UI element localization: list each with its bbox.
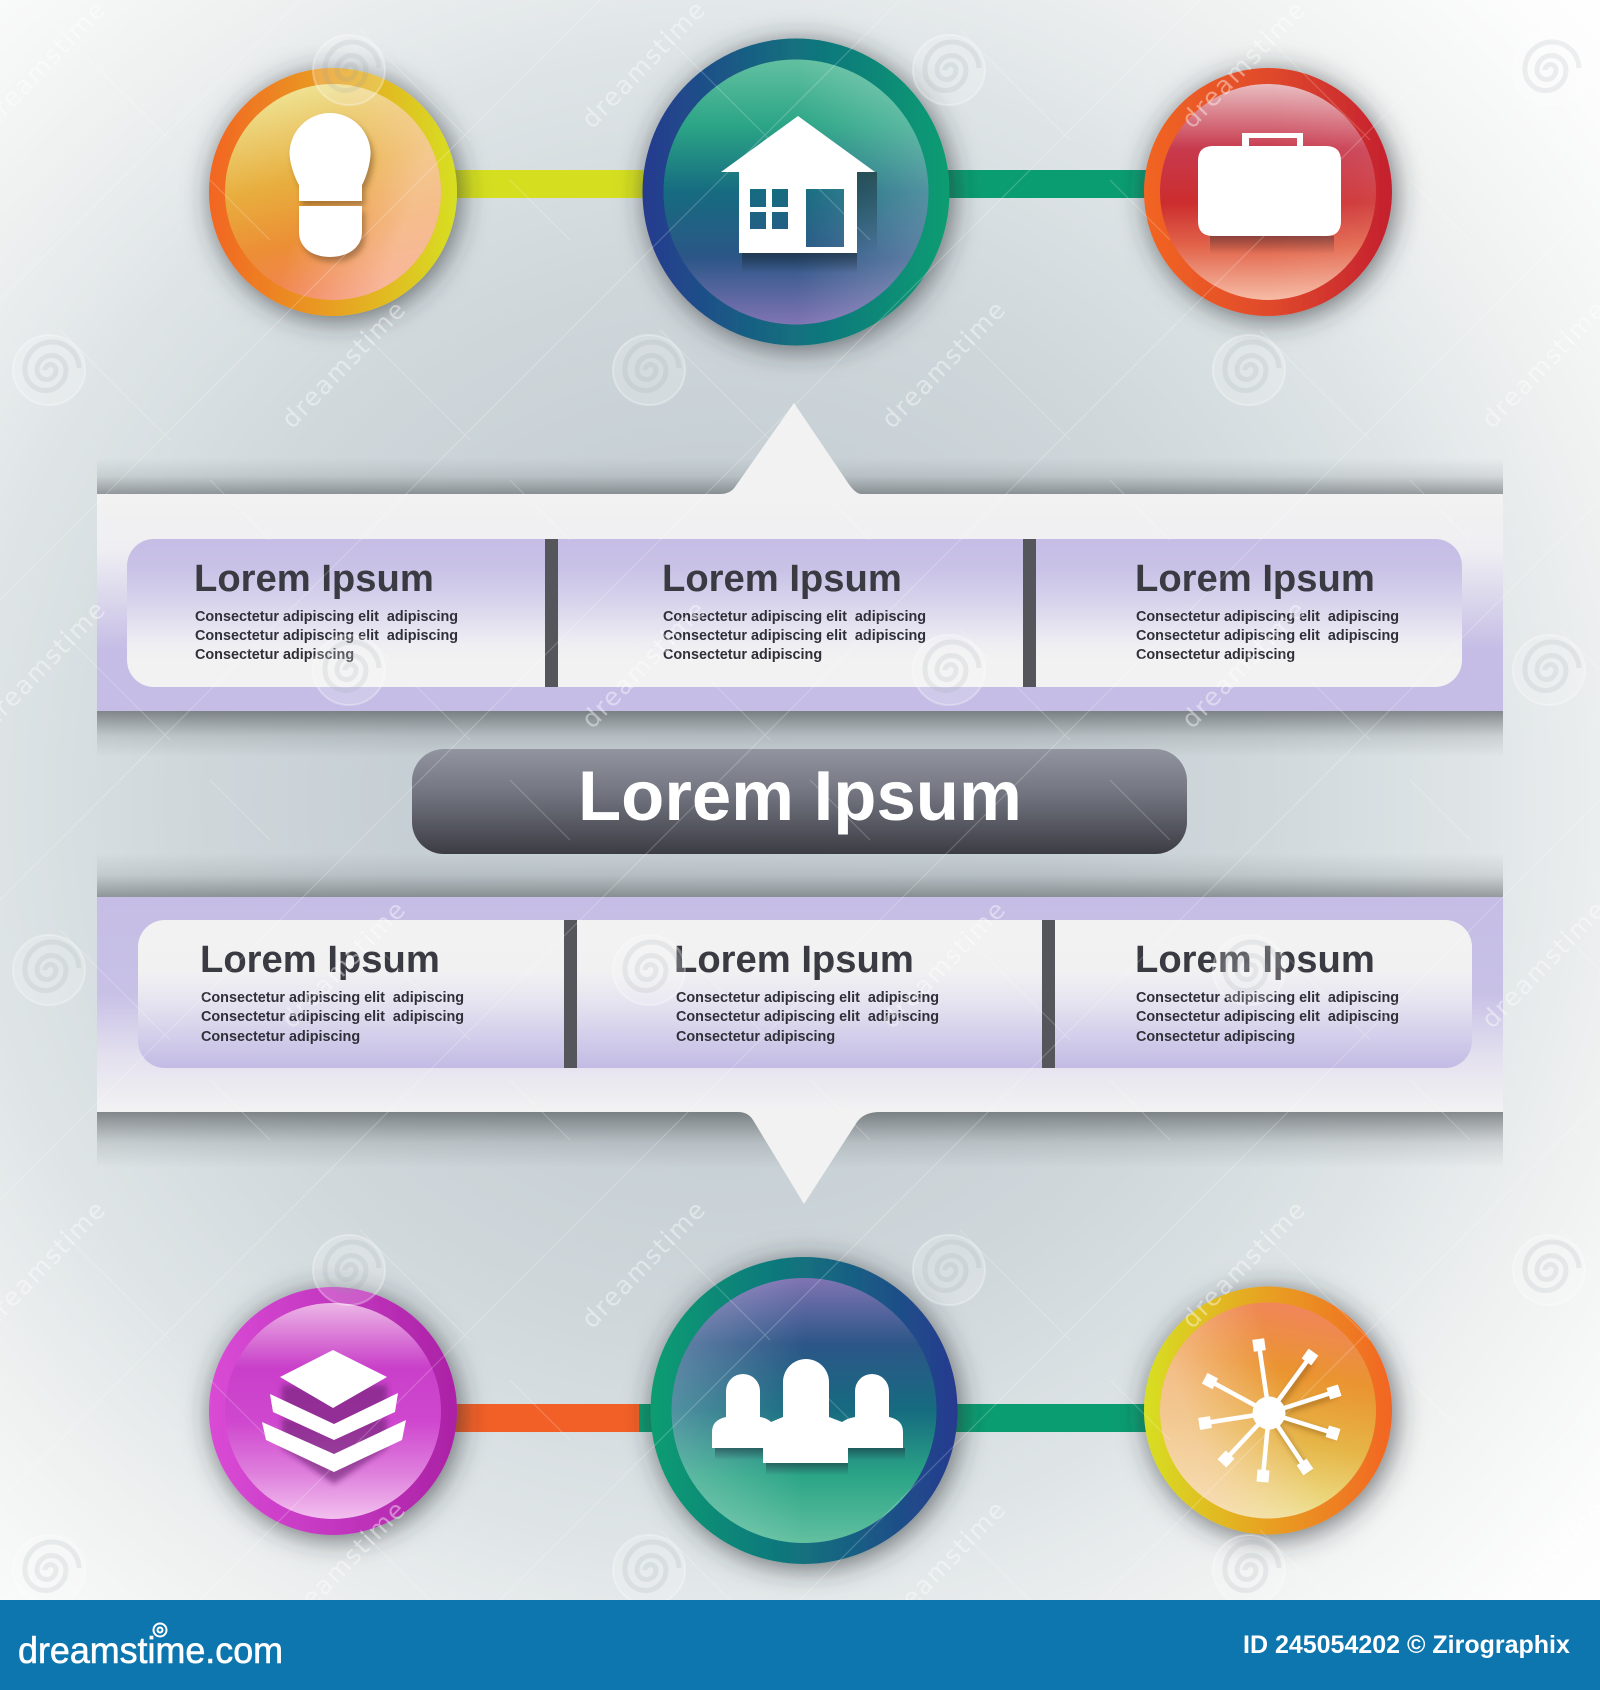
text block: column 3: Consectetur adipiscing elit adipiscing bbox=[1136, 609, 1399, 625]
text block: column 1: Lorem Ipsum bbox=[194, 557, 434, 600]
watermark overlay: dreamstime bbox=[276, 894, 412, 1034]
circle: briefcase bbox=[1144, 68, 1392, 316]
column divider 2 bbox=[1023, 539, 1036, 687]
circle: house bbox=[642, 38, 950, 346]
text block: column 1: Consectetur adipiscing elit adipiscing bbox=[195, 609, 458, 625]
column divider 2 bbox=[1042, 920, 1055, 1068]
text block: column 1: Consectetur adipiscing bbox=[195, 647, 354, 663]
watermark overlay: dreamstime bbox=[876, 894, 1012, 1034]
heading: Lorem Ipsum bbox=[578, 756, 1022, 835]
text block: column 1: Consectetur adipiscing elit adipiscing bbox=[201, 990, 464, 1006]
text block: column 1: Consectetur adipiscing elit adipiscing bbox=[201, 1009, 464, 1025]
text block: column 3: Consectetur adipiscing elit adipiscing bbox=[1136, 1009, 1399, 1025]
rounded content strip bbox=[138, 920, 1472, 1068]
central title pill bbox=[412, 749, 1187, 854]
text block: column 2: Consectetur adipiscing elit adipiscing bbox=[663, 628, 926, 644]
text block: column 1: Consectetur adipiscing elit adipiscing bbox=[195, 628, 458, 644]
watermark overlay: dreamstime bbox=[1176, 594, 1312, 734]
icon: logo spiral bbox=[154, 1624, 166, 1636]
rounded content strip bbox=[127, 539, 1462, 687]
text block: column 1 bbox=[194, 557, 458, 663]
bottom connector lines bbox=[450, 1404, 1150, 1432]
text block: column 1: Lorem Ipsum bbox=[200, 938, 440, 981]
column divider 1 bbox=[545, 539, 558, 687]
text block: column 2 bbox=[662, 557, 926, 663]
text block: column 3: Consectetur adipiscing elit adipiscing bbox=[1136, 990, 1399, 1006]
logo text: dreamstime.com bbox=[18, 1630, 283, 1671]
watermark overlay: dreamstime bbox=[276, 1494, 412, 1634]
panel: lower info panel bbox=[97, 897, 1503, 1204]
watermark overlay: dreamstime bbox=[576, 594, 712, 734]
text block: column 3 bbox=[1135, 557, 1399, 663]
watermark overlay: dreamstime bbox=[1176, 1194, 1312, 1334]
icon: network hub bbox=[1198, 1338, 1342, 1483]
top connector lines bbox=[450, 170, 1150, 198]
circle: network hub bbox=[1144, 1286, 1392, 1534]
text block: column 3 bbox=[1135, 938, 1399, 1045]
watermark overlay: dreamstime bbox=[876, 1494, 1012, 1634]
text block: column 1 bbox=[200, 938, 464, 1045]
text block: column 3: Consectetur adipiscing bbox=[1136, 1029, 1295, 1045]
text block: column 2: Consectetur adipiscing elit adipiscing bbox=[676, 1009, 939, 1025]
panel background with pointer bbox=[97, 403, 1503, 711]
panel background with pointer bbox=[97, 897, 1503, 1204]
text block: column 2: Lorem Ipsum bbox=[674, 938, 914, 981]
column divider 1 bbox=[564, 920, 577, 1068]
watermark overlay: dreamstime bbox=[276, 294, 412, 434]
watermark overlay: dreamstime bbox=[876, 294, 1012, 434]
text block: column 3: Consectetur adipiscing elit adipiscing bbox=[1136, 628, 1399, 644]
icon: house bbox=[721, 116, 877, 273]
text block: column 2 bbox=[674, 938, 939, 1045]
icon: lightbulb bbox=[290, 113, 374, 262]
panel shadow bands bbox=[97, 458, 1503, 1168]
panel: upper info panel bbox=[97, 403, 1503, 711]
circle: people bbox=[650, 1257, 958, 1564]
text block: column 2: Consectetur adipiscing bbox=[676, 1029, 835, 1045]
text block: column 2: Consectetur adipiscing elit adipiscing bbox=[676, 990, 939, 1006]
text block: column 3: Lorem Ipsum bbox=[1135, 938, 1375, 981]
icon: briefcase bbox=[1198, 133, 1341, 254]
text block: column 2: Consectetur adipiscing bbox=[663, 647, 822, 663]
icon: layers bbox=[262, 1350, 406, 1484]
text block: column 1: Consectetur adipiscing bbox=[201, 1029, 360, 1045]
text block: column 2: Lorem Ipsum bbox=[662, 557, 902, 600]
watermark overlay: dreamstime bbox=[576, 1194, 712, 1334]
circle: lightbulb bbox=[209, 68, 457, 316]
image id credit: ID 245054202 © Zirographix bbox=[1243, 1631, 1570, 1659]
text block: column 3: Consectetur adipiscing bbox=[1136, 647, 1295, 663]
text block: column 2: Consectetur adipiscing elit adipiscing bbox=[663, 609, 926, 625]
circle: layers bbox=[209, 1287, 457, 1535]
footer bar bbox=[0, 1600, 1600, 1690]
text block: column 3: Lorem Ipsum bbox=[1135, 557, 1375, 600]
icon: people bbox=[712, 1359, 905, 1475]
